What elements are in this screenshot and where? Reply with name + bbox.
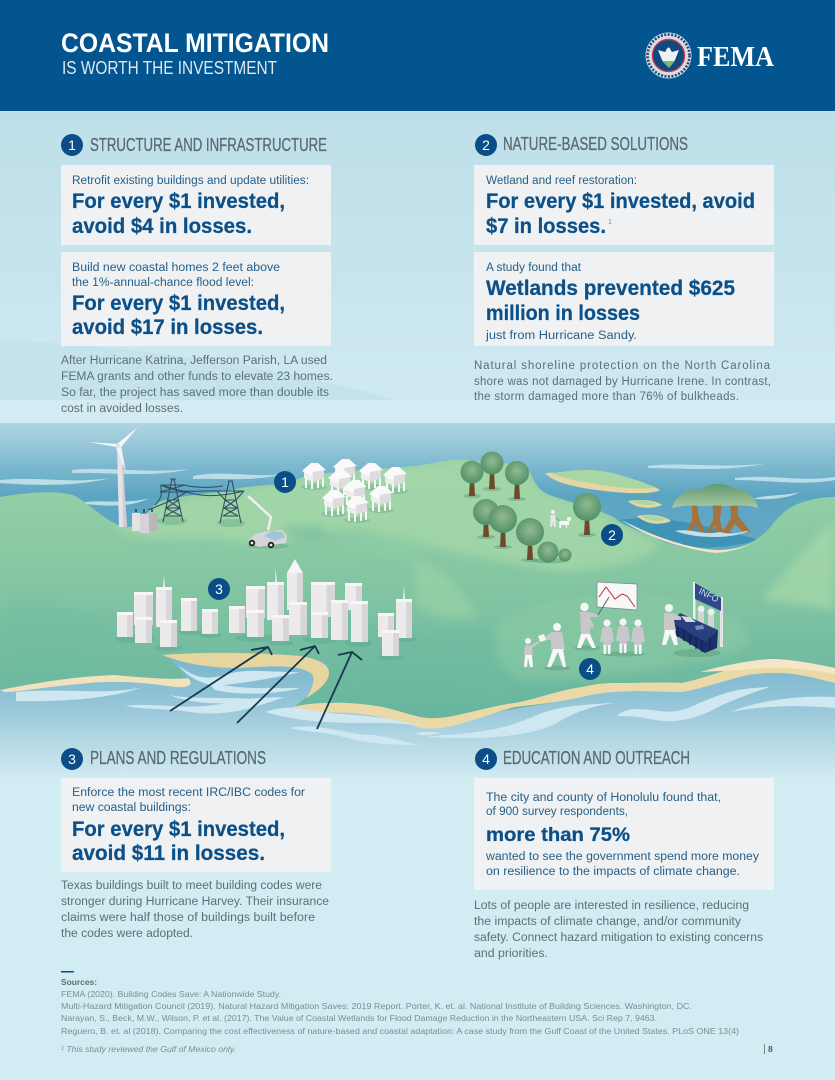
presentation group: [524, 582, 645, 680]
callout: building codes: avoid $11 in losses.: [72, 842, 265, 865]
mangrove trees: [672, 484, 758, 537]
callout: wetland and reef: 1: [608, 219, 612, 226]
heading 3: PLANS AND REGULATIONS: [90, 748, 266, 768]
paragraph: community concerns: the impacts of climate change, and/or community: [474, 916, 741, 928]
callout: Honolulu survey: The city and county of Honolulu found that,: [486, 792, 721, 804]
arrow: surge 1: [170, 647, 272, 711]
number badge map 1: 1: [281, 474, 289, 490]
callout: building codes: new coastal buildings:: [72, 802, 191, 814]
sources: Multi-Hazard Mitigation Council (2019). Natural Hazard Mitigation Saves: 2019 Report. Porter, K. et. al. National Institute of Building Sciences. Washington, DC.: [61, 1001, 692, 1011]
callout: wetland and reef: For every $1 invested, avoid: [486, 190, 755, 213]
callout: wetland and reef: [474, 165, 774, 245]
heading 1: STRUCTURE AND INFRASTRUCTURE: [90, 135, 327, 155]
footnote: ¹ This study reviewed the Gulf of Mexico only.: [61, 1044, 236, 1054]
subtitle: IS WORTH THE INVESTMENT: [62, 58, 277, 78]
paragraph: Texas buildings: Texas buildings built to meet building codes were: [61, 880, 322, 892]
callout: Honolulu survey: [474, 778, 774, 890]
number badge map 2: [601, 524, 623, 546]
callout: wetland and reef: Wetland and reef restoration:: [486, 175, 637, 187]
paragraph: Texas buildings: stronger during Hurricane Harvey. Their insurance: [61, 896, 329, 908]
paragraph: Jefferson Parish: FEMA grants and other funds to elevate 23 homes.: [61, 371, 333, 383]
info booth: INFO: [697, 586, 720, 604]
panel: structure and infrastructure: [61, 134, 333, 415]
beaches: [0, 653, 835, 729]
callout: retrofit: [61, 165, 331, 245]
number badge 4: [475, 748, 497, 770]
callout: building codes: Enforce the most recent IRC/IBC codes for: [72, 787, 305, 799]
callout: retrofit: avoid $4 in losses.: [72, 215, 252, 238]
callout: Honolulu survey: on resilience to the impacts of climate change.: [486, 866, 740, 878]
water swirls: [16, 665, 835, 745]
paragraph: Jefferson Parish: After Hurricane Katrina, Jefferson Parish, LA used: [61, 355, 327, 367]
land: [0, 459, 835, 723]
callout: wetlands Sandy: [474, 252, 774, 346]
paragraph: community concerns: [474, 900, 763, 960]
callout: new homes: [61, 252, 331, 346]
heading 2: NATURE-BASED SOLUTIONS: [503, 134, 688, 154]
panel: education and outreach: [474, 748, 774, 960]
callout: wetlands Sandy: million in losses: [486, 302, 640, 325]
presenter: [574, 603, 600, 650]
callout: Honolulu survey: more than 75%: [486, 825, 630, 846]
number badge map 1: [274, 471, 296, 493]
callout: Honolulu survey: of 900 survey respondents,: [486, 806, 628, 818]
number badge 3: [61, 748, 83, 770]
page number: [764, 1044, 773, 1054]
paragraph: Texas buildings: claims were half those of buildings built before: [61, 912, 315, 924]
number badge map 3: [208, 578, 230, 600]
sources: Reguero, B. et. al (2018). Comparing the cost effectiveness of nature-based and coastal adaptation: A case study from the Gulf Coast of the United States. PLoS ONE 13(4): [61, 1026, 739, 1036]
arrow: surge 3: [317, 652, 362, 729]
sources: Sources:: [61, 977, 97, 987]
callout: building codes: [61, 778, 331, 872]
callout: new homes: avoid $17 in losses.: [72, 316, 263, 339]
power lines and pylons: [148, 479, 245, 527]
utility truck with crane: [247, 496, 289, 549]
callout: wetlands Sandy: A study found that: [486, 262, 582, 274]
sources: Narayan, S., Beck, M.W., Wilson, P. et al. (2017). The Value of Coastal Wetlands for Flood Damage Reduction in the Northeastern USA. Sci Rep 7, 9463.: [61, 1013, 657, 1023]
sources: [61, 971, 739, 1036]
number badge map 2: 2: [608, 527, 616, 543]
audience: [600, 618, 645, 656]
callout: retrofit: Retrofit existing buildings and update utilities:: [72, 175, 309, 187]
paragraph: community concerns: safety. Connect hazard mitigation to existing concerns: [474, 932, 763, 944]
number badge 1: [61, 134, 83, 156]
islands: [545, 470, 757, 553]
transformers: [132, 508, 158, 533]
number badge 2: 2: [482, 137, 490, 153]
adult and child with flyer: [524, 623, 570, 670]
illustration: coastal community map: [0, 423, 835, 780]
callout: wetlands Sandy: just from Hurricane Sandy.: [485, 330, 637, 342]
paragraph: Jefferson Parish: So far, the project has saved more than double its: [61, 387, 329, 399]
chart board: [597, 582, 637, 615]
heading 4: EDUCATION AND OUTREACH: [503, 748, 690, 768]
paragraph: North Carolina: shore was not damaged by Hurricane Irene. In contrast,: [474, 376, 771, 388]
paragraph: North Carolina: Natural shoreline protection on the North Carolina: [474, 360, 771, 372]
number badge map 3: 3: [215, 581, 223, 597]
city skyline: [115, 559, 416, 660]
arrow: surge 2: [237, 646, 319, 723]
callout: new homes: the 1%-annual-chance flood level:: [72, 277, 254, 289]
icon: DHS seal: [646, 32, 692, 78]
wind turbine: [88, 427, 138, 527]
upper background waves: [0, 111, 835, 423]
callout: retrofit: For every $1 invested,: [72, 190, 285, 213]
elevated houses: [301, 459, 408, 523]
info booth: [662, 582, 723, 657]
FEMA wordmark: FEMA: [697, 42, 775, 73]
land highlights: [116, 464, 835, 680]
header band: [0, 0, 835, 111]
staff member: [662, 604, 681, 645]
paragraph: community concerns: and priorities.: [474, 948, 548, 960]
paragraph: North Carolina: [474, 360, 771, 403]
callout: new homes: For every $1 invested,: [72, 292, 285, 315]
callout: wetland and reef: $7 in losses.: [486, 215, 606, 238]
dog walker: [550, 510, 571, 528]
number badge 3: 3: [68, 751, 76, 767]
paragraph: Jefferson Parish: cost in avoided losses.: [61, 403, 183, 415]
number badge 2: [475, 134, 497, 156]
panel: plans and regulations: [61, 748, 331, 940]
callout: wetlands Sandy: Wetlands prevented $625: [486, 277, 735, 300]
paragraph: Texas buildings: [61, 880, 329, 940]
callout: building codes: For every $1 invested,: [72, 818, 285, 841]
number badge map 4: 4: [586, 661, 594, 677]
number badge 4: 4: [482, 751, 490, 767]
forest trees: [460, 452, 601, 564]
number badge 1: 1: [68, 137, 76, 153]
paragraph: community concerns: Lots of people are interested in resilience, reducing: [474, 900, 749, 912]
callout: Honolulu survey: wanted to see the government spend more money: [485, 851, 759, 863]
panel: nature-based solutions: [474, 134, 774, 403]
page number: 8: [768, 1044, 773, 1054]
title: COASTAL MITIGATION: [61, 28, 329, 58]
water: [0, 423, 835, 780]
paragraph: Jefferson Parish: [61, 355, 333, 415]
paragraph: Texas buildings: the codes were adopted.: [61, 928, 193, 940]
paragraph: North Carolina: the storm damaged more than 76% of bulkheads.: [474, 391, 739, 403]
sources: FEMA (2020). Building Codes Save: A Nationwide Study.: [61, 989, 281, 999]
callout: new homes: Build new coastal homes 2 feet above: [72, 262, 280, 274]
